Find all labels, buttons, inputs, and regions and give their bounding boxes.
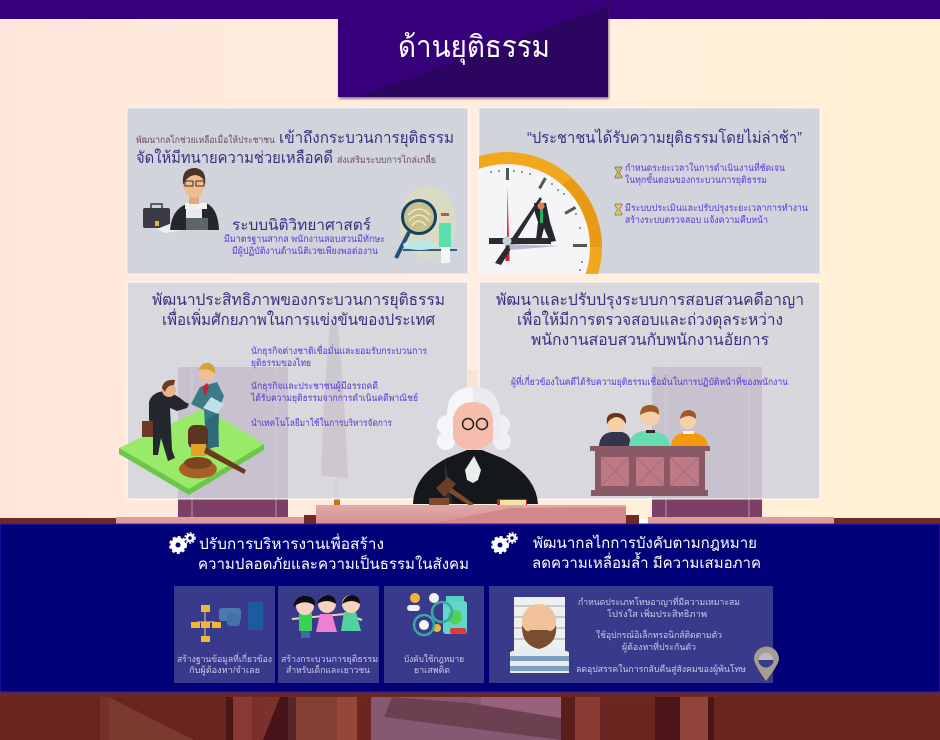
background wall: [0, 19, 940, 519]
left banner heading: ความปลอดภัยและความเป็นธรรมในสังคม: [198, 554, 469, 573]
icon: map pin: [754, 646, 779, 681]
floor ledge: [0, 515, 940, 525]
timely justice panel text: กำหนดระยะเวลาในการดำเนินงานที่ชัดเจน: [625, 161, 785, 174]
legal aid panel text: มีผู้ปฏิบัติงานด้านนิติเวชเพียงพอต่องาน: [232, 245, 378, 257]
investigation panel text: เพื่อให้มีการตรวจสอบและถ่วงดุลระหว่าง: [517, 308, 783, 330]
efficiency panel text: นักธุรกิจต่างชาติเชื่อมั่นและยอมรับกระบวนการ: [251, 344, 427, 357]
legal aid panel text: จัดให้มีทนายความช่วยเหลือคดี: [136, 148, 333, 167]
left banner heading: ปรับการบริหารงานเพื่อสร้าง: [199, 533, 384, 553]
left banner heading: [198, 533, 469, 573]
icon: hourglass bottom: [615, 204, 622, 215]
timely justice panel text: “ประชาชนได้รับความยุติธรรมโดยไม่ล่าช้า”: [527, 128, 802, 148]
panel: timely justice background: [479, 108, 820, 274]
card: database: กับผู้ต้องหา/จำเลย: [189, 665, 260, 676]
investigation panel text: ผู้ที่เกี่ยวข้องในคดีได้รับความยุติธรรมเชื่อมั่นในการปฏิบัติหน้าที่ของพนักงาน: [511, 375, 788, 388]
icon: jury box: [590, 405, 710, 496]
judge desk: [316, 505, 626, 525]
courtroom back pillars: [178, 367, 762, 519]
efficiency panel text: ได้รับความยุติธรรมจากการดำเนินคดีพาณิชย์: [250, 392, 418, 404]
timely justice panel text: มีระบบประเมินและปรับปรุงระยะเวลาการทำงาน: [625, 202, 808, 214]
right banner heading: [532, 534, 761, 572]
investigation panel text: พนักงานสอบสวนกับพนักงานอัยการ: [531, 332, 769, 349]
icon: gears right: [492, 533, 517, 553]
card: sentencing and offender: โปร่งใส เพิ่มประสิทธิภาพ: [607, 607, 707, 619]
panel: investigation background: [479, 282, 820, 499]
card: narcotics law: บังคับใช้กฎหมาย: [404, 654, 464, 664]
icon: lawyer with briefcase: [143, 168, 219, 233]
right banner heading: ลดความเหลื่อมล้ำ มีความเสมอภาค: [532, 552, 761, 572]
icon: forensic magnifier: [396, 186, 457, 263]
legal aid panel text: มีมาตรฐานสากล พนักงานสอบสวนมีทักษะ: [224, 233, 385, 245]
card: juvenile justice: [278, 586, 379, 683]
card: narcotics law: ยาเสพติด: [414, 665, 450, 675]
card: sentencing and offender: ลดอุปสรรคในการกลับคืนสู่สังคมของผู้พ้นโทษ: [576, 664, 746, 675]
efficiency panel text: นักธุรกิจและประชาชนผู้มีอรรถคดี: [251, 380, 378, 392]
card: juvenile justice: สำหรับเด็กและเยาวชน: [286, 663, 370, 675]
icon: handshake on green platform with gavel: [119, 363, 264, 495]
right banner heading: พัฒนากลไกการบังคับตามกฎหมาย: [533, 534, 757, 552]
legal aid panel text: ส่งเสริมระบบการไกล่เกลี่ย: [337, 153, 436, 166]
title banner: [338, 3, 608, 97]
legal aid panel text: พัฒนากลไกช่วยเหลือเมื่อให้ประชาชน: [136, 133, 275, 146]
card: narcotics law: [384, 586, 484, 683]
card: database: [174, 586, 275, 683]
card: juvenile justice: สร้างกระบวนการยุติธรรม: [281, 654, 378, 665]
timely justice panel text: [527, 128, 808, 226]
card: sentencing and offender: ผู้ต้องหาที่ประกันตัว: [622, 640, 696, 653]
panel: efficiency background: [127, 282, 468, 499]
card: database: สร้างฐานข้อมูลที่เกี่ยวข้อง: [177, 652, 272, 665]
flag behind panels: [321, 325, 348, 505]
efficiency panel text: พัฒนาประสิทธิภาพของกระบวนการยุติธรรม: [152, 292, 445, 310]
efficiency panel text: [152, 292, 445, 429]
icon: hourglass top: [615, 167, 622, 178]
card: sentencing and offender: [489, 586, 773, 683]
efficiency panel text: เพื่อเพิ่มศักยภาพในการแข่งขันของประเทศ: [162, 308, 435, 329]
efficiency panel text: ยุติธรรมของไทย: [251, 357, 311, 369]
timely justice panel text: สร้างระบบตรวจสอบ แจ้งความคืบหน้า: [625, 215, 768, 226]
title banner: ด้านยุติธรรม: [398, 31, 550, 66]
card: sentencing and offender: กำหนดประเภทโทษอาญาที่มีความเหมาะสม: [578, 595, 740, 607]
efficiency panel text: นำเทคโนโลยีมาใช้ในการบริหารจัดการ: [251, 417, 392, 429]
legal aid panel text: เข้าถึงกระบวนการยุติธรรม: [279, 129, 454, 148]
legal aid panel text: ระบบนิติวิทยาศาสตร์: [232, 217, 371, 234]
icon: gears left: [170, 533, 195, 553]
navy banner: [0, 524, 940, 692]
judge: [413, 370, 538, 506]
top bar: [0, 0, 940, 19]
investigation panel text: [496, 291, 804, 388]
card: sentencing and offender: ใช้อุปกรณ์อิเล็กทรอนิกส์ติดตามตัว: [596, 628, 722, 641]
bottom courtroom floor: [0, 692, 940, 740]
timely justice panel text: ในทุกขั้นตอนของกระบวนการยุติธรรม: [625, 173, 767, 186]
panel: legal aid background: [127, 108, 468, 274]
icon: clock with businessman: [479, 152, 602, 274]
legal aid panel text: [136, 129, 454, 257]
investigation panel text: พัฒนาและปรับปรุงระบบการสอบสวนคดีอาญา: [496, 291, 804, 310]
